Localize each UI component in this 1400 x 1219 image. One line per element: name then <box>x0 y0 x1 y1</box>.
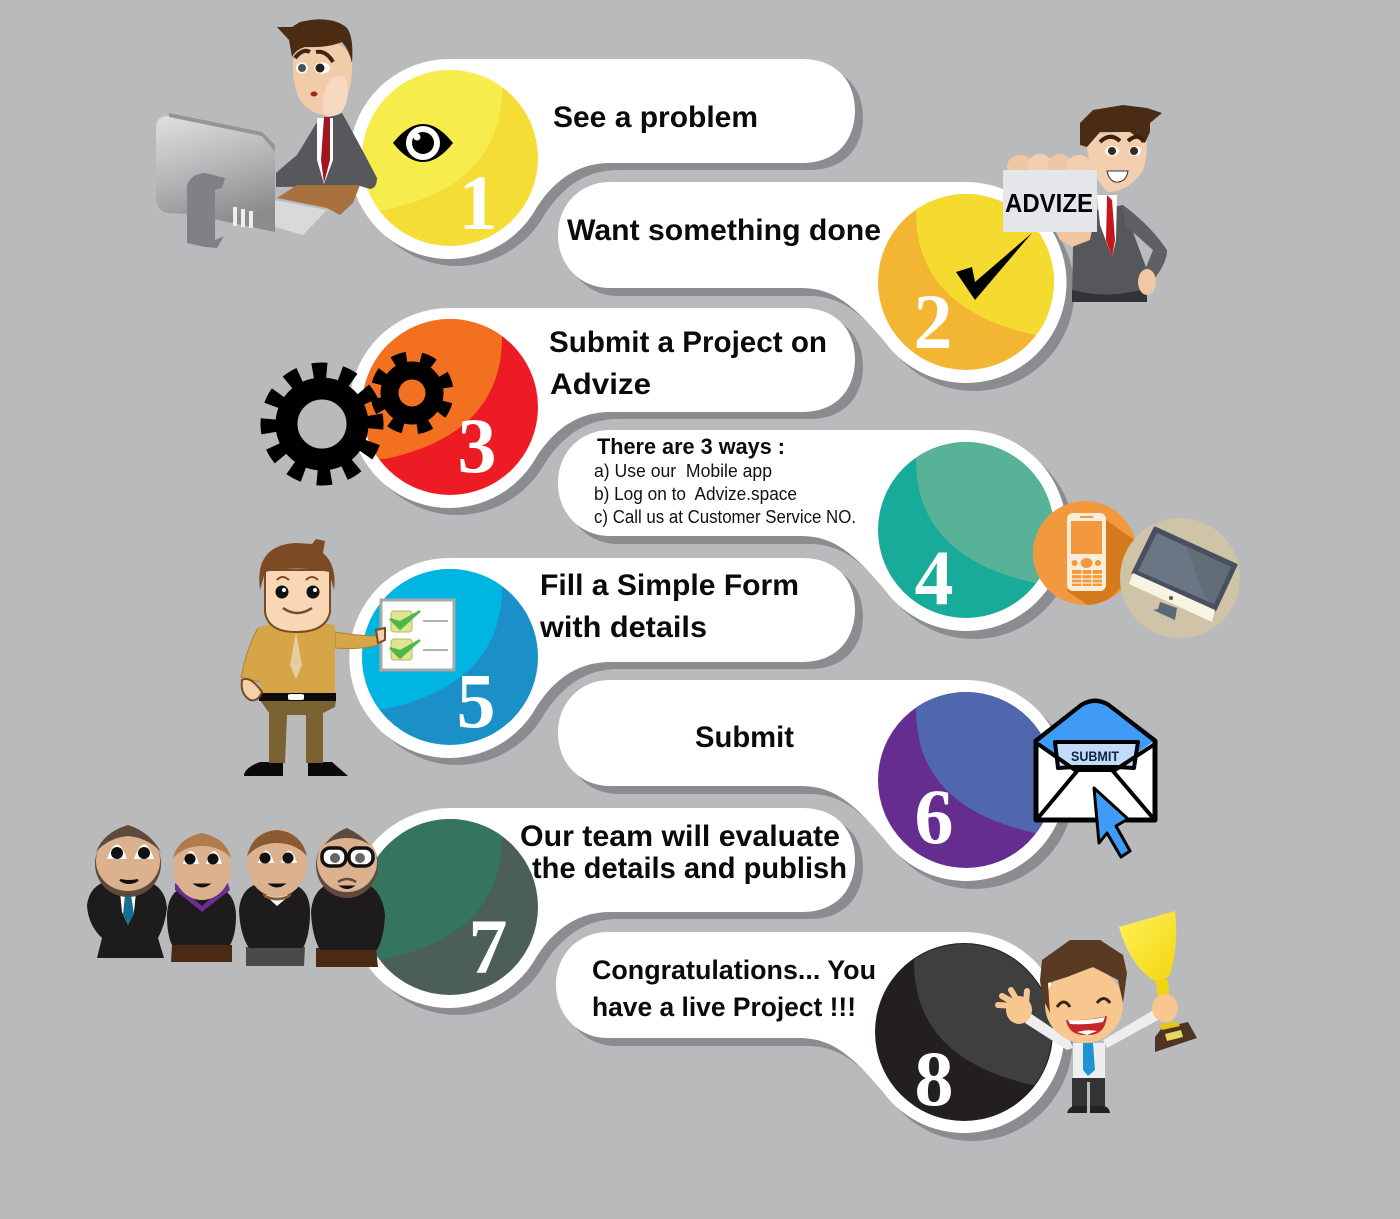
icon: checklist <box>381 600 454 670</box>
icon: envelope with submit card and cursor <box>1036 701 1155 857</box>
character: man holding advize card <box>1003 105 1167 302</box>
pill and numbered circle 3 <box>340 299 863 515</box>
character: man presenting checklist <box>241 539 385 776</box>
icon: check mark <box>956 233 1032 300</box>
icon: trophy <box>1119 911 1197 1052</box>
icon: small gear <box>363 344 461 442</box>
characters: four team members <box>87 825 385 967</box>
number 8: 8 <box>914 1035 954 1122</box>
number 4: 4 <box>914 534 954 621</box>
team member three <box>239 829 310 966</box>
character: happy man with trophy <box>998 940 1178 1113</box>
team member four <box>311 828 385 967</box>
heading: team will evaluate: the details and publish <box>532 852 847 885</box>
icon: envelope with submit card and cursor: SUBMIT <box>1071 748 1119 764</box>
number 2: 2 <box>914 278 952 365</box>
step 2 panel: want something done <box>558 105 1167 391</box>
heading: fill a simple form with details: with details <box>539 611 707 644</box>
number 7: 7 <box>468 903 508 990</box>
pill and numbered circle 6 <box>558 668 1080 889</box>
heading: submit a project on advize: Submit a Project on <box>549 326 827 359</box>
heading: congratulations: have a live Project !!! <box>592 992 856 1022</box>
step 5 panel: fill a simple form <box>241 539 863 776</box>
pill and numbered circle 8 <box>556 920 1078 1141</box>
team member two <box>167 833 236 962</box>
heading: submit a project on advize: Advize <box>550 368 651 401</box>
step 6 panel: submit <box>558 668 1155 889</box>
pill and numbered circle 1 <box>340 50 863 266</box>
icon: mobile phone <box>1033 501 1137 605</box>
character: worried man at computer <box>156 19 377 248</box>
heading: fill a simple form with details <box>539 569 799 644</box>
heading: want something done: Want something done <box>567 214 881 247</box>
number 5: 5 <box>456 657 496 744</box>
heading: team will evaluate: Our team will evaluate <box>520 820 840 853</box>
heading: see a problem: See a problem <box>553 101 758 134</box>
heading: submit a project on advize <box>549 326 827 401</box>
heading: team will evaluate <box>520 820 847 885</box>
number 1: 1 <box>458 159 498 246</box>
text block: three ways: a) Use our Mobile app <box>594 461 772 481</box>
pill and numbered circle 2 <box>558 170 1080 391</box>
number 6: 6 <box>914 773 954 860</box>
step 1 panel: see a problem <box>156 19 863 266</box>
heading: congratulations <box>592 955 876 1022</box>
pill and numbered circle 5 <box>340 549 863 765</box>
pill and numbered circle 4 <box>558 418 1080 639</box>
icon: eye <box>393 124 453 162</box>
number 3: 3 <box>458 402 496 489</box>
advize card label: ADVIZE <box>1005 188 1093 218</box>
heading: fill a simple form with details: Fill a Simple Form <box>540 569 799 602</box>
heading: congratulations: Congratulations... You <box>592 955 876 985</box>
text block: three ways: c) Call us at Customer Service NO. <box>594 507 856 527</box>
step 7 panel: team evaluates <box>87 799 863 1015</box>
heading: submit: Submit <box>695 721 794 754</box>
text block: three ways: There are 3 ways : <box>597 434 785 459</box>
icon: large gear <box>261 363 383 485</box>
step 8 panel: live project <box>556 911 1197 1141</box>
team member one <box>87 825 167 958</box>
step 4 panel: three ways <box>558 418 1240 639</box>
pill and numbered circle 7 <box>340 799 863 1015</box>
text block: three ways: b) Log on to Advize.space <box>594 484 797 504</box>
step 3 panel: submit a project <box>261 299 863 515</box>
icon: desktop monitor <box>1120 518 1240 638</box>
text block: three ways <box>594 434 856 527</box>
